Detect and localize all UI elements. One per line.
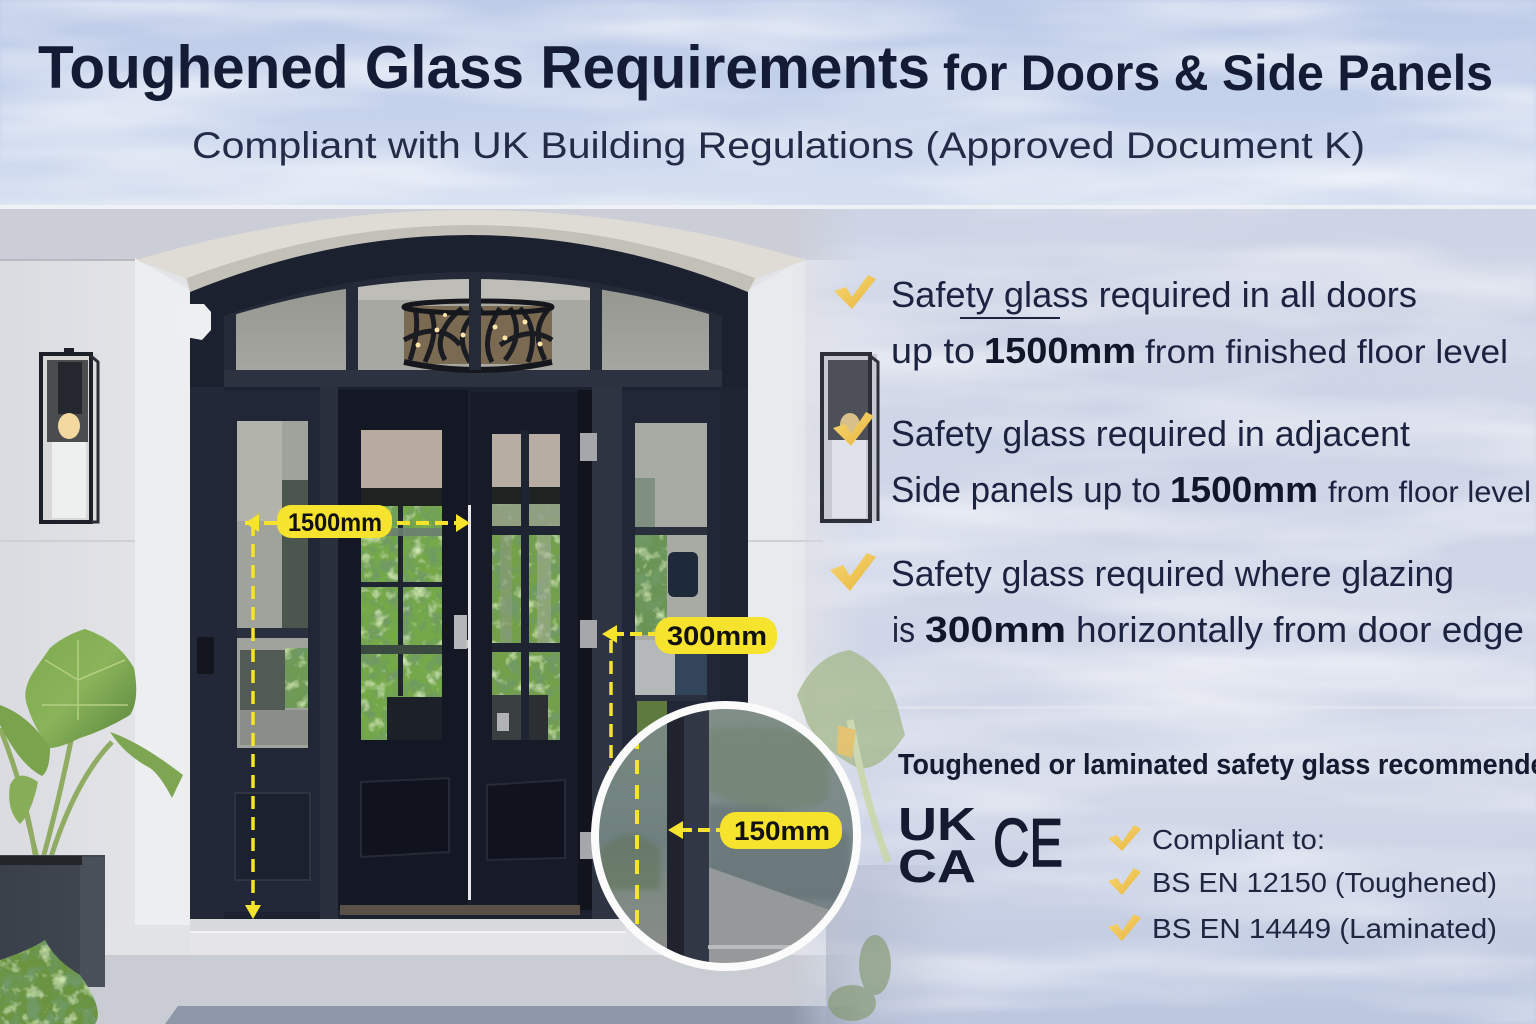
check icon 1 xyxy=(834,275,876,309)
right lantern faded xyxy=(822,354,878,521)
dimension: 300mm xyxy=(602,617,777,770)
dimension: 300mm: 300mm xyxy=(667,621,767,651)
requirement 1: doors xyxy=(834,274,1508,371)
wall sensor xyxy=(180,304,211,340)
subtitle: Compliant with UK Building Regulations (Approved Document K) xyxy=(192,125,1365,166)
requirement 3: 300mm rule: 300mm xyxy=(925,609,1066,650)
check icon 2 xyxy=(833,412,874,446)
right planter faded xyxy=(826,865,986,1024)
panel: right information background xyxy=(790,208,1536,1024)
magnifier: 150mm detail: 150mm xyxy=(734,816,830,846)
left side panel xyxy=(224,390,320,912)
small check 1 xyxy=(1108,825,1141,851)
requirement 2: side panels: 1500mm xyxy=(1170,469,1318,510)
right plant faded xyxy=(797,650,905,862)
dimension: 1500mm width and height: 1500mm xyxy=(288,509,382,537)
requirement 3: 300mm rule: horizontally from door edge xyxy=(1076,609,1524,650)
requirement 2: side panels xyxy=(833,412,1531,510)
requirement 1: doors: Safety glass required in all doors xyxy=(891,274,1417,315)
UKCA mark: CA xyxy=(898,840,976,892)
right door leaf xyxy=(471,390,592,910)
small check 2 xyxy=(1108,868,1141,895)
requirement 3: 300mm rule xyxy=(830,553,1524,650)
check icon 3 xyxy=(830,553,876,591)
door frame xyxy=(190,235,748,920)
requirement 3: 300mm rule: is xyxy=(892,609,915,650)
UKCA mark: UK xyxy=(898,798,976,850)
requirement 2: side panels: Safety glass required in adjacent xyxy=(891,413,1410,454)
header divider xyxy=(0,205,1536,209)
compliance list: BS EN 12150 (Toughened) xyxy=(1152,867,1497,898)
left door leaf xyxy=(338,390,474,910)
building wall xyxy=(0,208,860,1024)
CE mark: CE xyxy=(993,805,1063,881)
requirement 2: side panels: Side panels up to xyxy=(891,469,1161,510)
compliance list: BS EN 14449 (Laminated) xyxy=(1152,913,1497,944)
left bush xyxy=(0,940,98,1024)
requirement 2: side panels: from floor level xyxy=(1328,476,1531,509)
dimension: 1500mm width and height xyxy=(245,505,470,919)
header background xyxy=(0,0,1536,208)
left wall lantern xyxy=(41,348,98,522)
door gap xyxy=(468,505,471,900)
title: for Doors & Side Panels xyxy=(943,45,1493,101)
UKCA mark xyxy=(898,798,976,892)
access keypad xyxy=(197,637,214,674)
requirement 1: doors: 1500mm xyxy=(984,330,1136,371)
stone arch xyxy=(136,210,806,292)
door hinges xyxy=(580,433,597,859)
magnifier: 150mm detail xyxy=(590,700,865,980)
compliance list xyxy=(1108,824,1497,944)
requirement 3: 300mm rule: Safety glass required where glazing xyxy=(891,553,1454,594)
chandelier xyxy=(404,285,552,370)
title xyxy=(38,34,1493,101)
right bush faded xyxy=(828,935,891,1021)
requirement 1: doors: from finished floor level xyxy=(1145,333,1508,370)
requirement 1: doors: up to xyxy=(891,330,975,371)
left plant xyxy=(0,629,183,862)
threshold and step xyxy=(190,905,625,955)
title: Toughened Glass Requirements xyxy=(38,34,930,101)
small check 3 xyxy=(1108,914,1141,941)
right side panel xyxy=(622,390,720,920)
compliance list: Compliant to: xyxy=(1152,824,1325,855)
left planter xyxy=(0,855,105,987)
transom windows xyxy=(236,279,709,370)
